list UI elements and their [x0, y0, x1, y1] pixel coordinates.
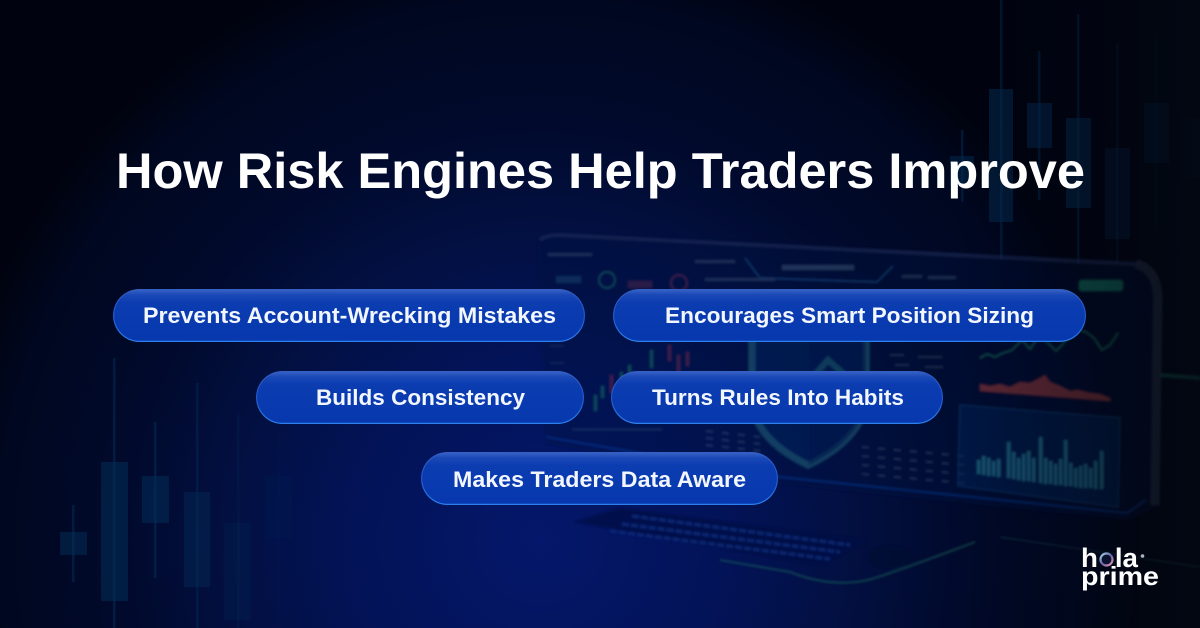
red area chart	[980, 375, 1110, 401]
keyboard and desk	[574, 375, 1200, 583]
pill: Encourages Smart Position Sizing	[613, 289, 1086, 342]
right edge vignette	[950, 0, 1200, 628]
pill: Makes Traders Data Aware	[421, 452, 778, 505]
logo: hola prime: prime	[1081, 561, 1159, 591]
logo: hola prime	[1081, 543, 1159, 591]
monitor bezel	[1136, 264, 1158, 505]
pill: Builds Consistency: Builds Consistency	[316, 385, 525, 410]
data tables	[890, 354, 943, 368]
table rows	[706, 431, 975, 484]
status button	[1079, 280, 1123, 291]
candlestick chart: bottom left	[60, 358, 292, 628]
pill: Makes Traders Data Aware: Makes Traders Data Aware	[453, 467, 746, 492]
logo bubble	[1100, 554, 1112, 566]
pill: Prevents Account-Wrecking Mistakes: Prevents Account-Wrecking Mistakes	[143, 303, 556, 328]
mouse	[869, 546, 909, 568]
pill: Builds Consistency	[256, 371, 584, 424]
dashboard header	[548, 253, 956, 282]
gauges	[556, 272, 687, 291]
monitor with risk dashboard	[538, 234, 1162, 520]
candlestick chart: top right	[950, 0, 1200, 264]
green line chart	[980, 330, 1118, 358]
candlestick panel	[550, 345, 689, 431]
monitor body	[538, 234, 1162, 520]
pill: Turns Rules Into Habits: Turns Rules Into Habits	[652, 385, 904, 410]
title: How Risk Engines Help Traders Improve	[116, 143, 1085, 199]
screen lower edge	[546, 437, 1146, 513]
keyboard	[574, 508, 866, 566]
desk mat edge light	[720, 542, 975, 583]
logo registered dot	[1141, 554, 1144, 558]
pill: Encourages Smart Position Sizing: Encourages Smart Position Sizing	[665, 303, 1034, 328]
shield icon	[752, 340, 866, 465]
bar chart panel	[958, 405, 1120, 507]
pill: Turns Rules Into Habits	[611, 371, 943, 424]
pill: Prevents Account-Wrecking Mistakes	[113, 289, 585, 342]
logo: hola prime: hola	[1081, 543, 1139, 573]
